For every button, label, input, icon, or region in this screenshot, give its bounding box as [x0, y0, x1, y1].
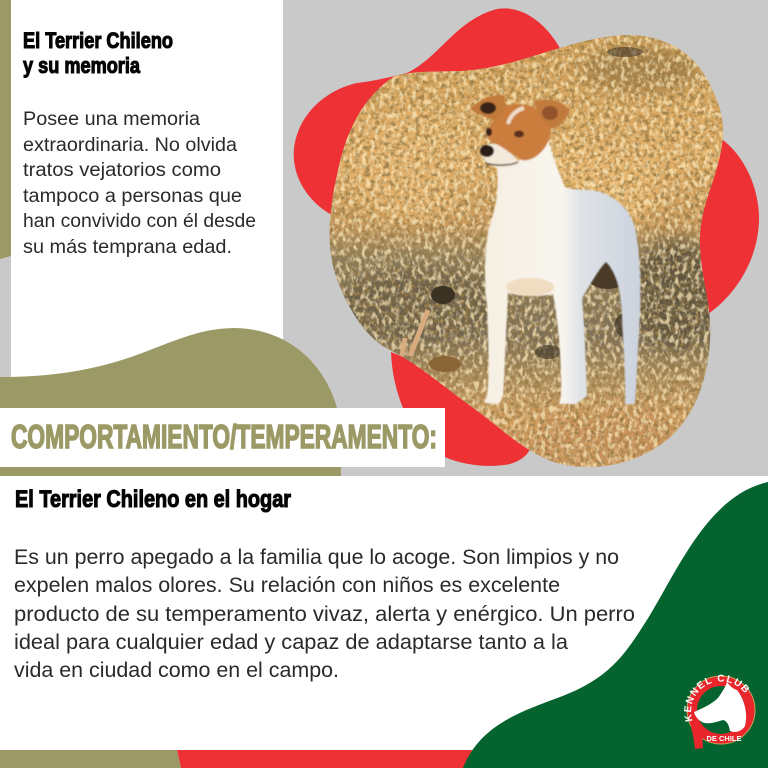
section title: COMPORTAMIENTO/TEMPERAMENTO: — [11, 418, 437, 455]
text block: memory: extraordinaria. No olvida — [23, 135, 237, 156]
dog blaze — [508, 108, 524, 124]
lower white panel — [0, 476, 768, 768]
text block: memory — [23, 109, 256, 258]
text block: memory: tampoco a personas que — [23, 186, 242, 207]
dog head — [487, 104, 551, 160]
logo dog head — [694, 682, 746, 732]
photo shadow areas — [335, 48, 720, 459]
dog chest warm tone — [506, 278, 554, 296]
bottom strip: red — [177, 750, 480, 768]
logo tassel — [690, 722, 703, 749]
red blob — [294, 8, 759, 466]
logo: Kennel Club de Chile — [684, 674, 756, 749]
text block: memory: su más temprana edad. — [23, 237, 232, 258]
photo grass texture — [320, 30, 740, 470]
logo ring text: KENNEL CLUB — [684, 674, 749, 722]
photo: terrier standing in dry grass — [320, 30, 740, 470]
olive strip — [0, 0, 11, 259]
section title — [0, 408, 445, 467]
text block: home: expelen malos olores. Su relación con niños es excelente — [14, 574, 560, 597]
white text panel — [11, 0, 283, 390]
olive wave — [0, 328, 341, 476]
text block: memory: Posee una memoria — [23, 109, 200, 130]
background panel — [0, 0, 768, 476]
text block: home: ideal para cualquier edad y capaz de adaptarse tanto a la — [14, 631, 568, 654]
heading: memory — [23, 28, 173, 78]
photo rocks — [429, 47, 643, 372]
dog body — [484, 140, 640, 404]
dog muzzle — [480, 144, 521, 168]
heading: memory: y su memoria — [23, 53, 141, 78]
text block: home: vida en ciudad como en el campo. — [14, 659, 339, 682]
dog — [470, 95, 640, 404]
dog left ear — [470, 95, 505, 121]
text block: memory: han convivido con él desde — [23, 211, 256, 232]
heading: memory: El Terrier Chileno — [23, 28, 173, 53]
heading: home: El Terrier Chileno en el hogar — [15, 486, 291, 513]
logo lower text: DE CHILE — [706, 734, 742, 743]
dog eyes and nose — [486, 128, 492, 136]
green corner shape — [463, 482, 768, 768]
text block: home — [14, 546, 635, 682]
bottom strip: olive — [0, 750, 181, 768]
dog right ear — [534, 99, 570, 128]
text block: home: Es un perro apegado a la familia que lo acoge. Son limpios y no — [14, 546, 619, 569]
photo ground — [320, 30, 740, 470]
text block: memory: tratos vejatorios como — [23, 160, 221, 181]
photo twig — [402, 310, 428, 356]
text block: home: producto de su temperamento vivaz, alerta y enérgico. Un perro — [14, 603, 635, 626]
